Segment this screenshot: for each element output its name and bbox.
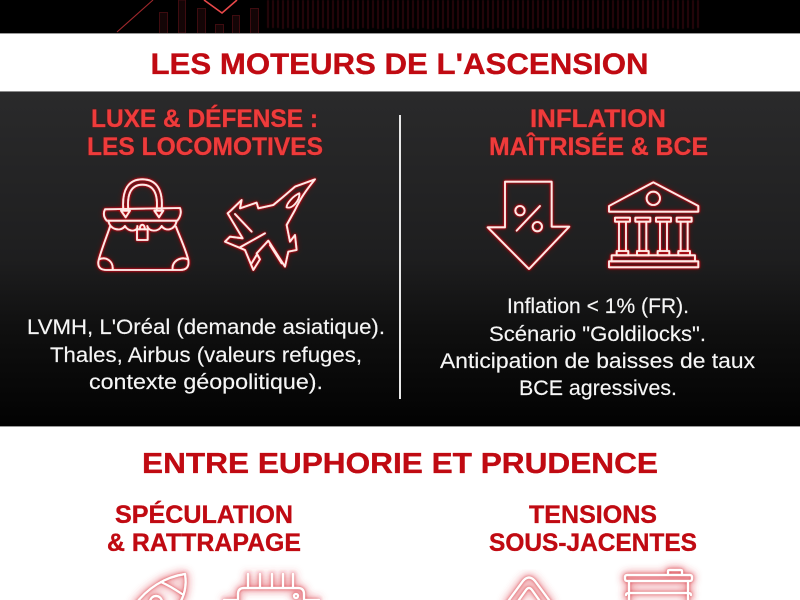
text: inflation details: BCE agressives. xyxy=(519,377,677,400)
column heading: tensions xyxy=(489,501,697,557)
text: inflation details xyxy=(440,295,756,400)
section band: les moteurs heading: LES MOTEURS DE L'ASCENSION xyxy=(150,48,648,81)
top banner: chart graphic xyxy=(0,0,800,34)
column heading: tensions: TENSIONS xyxy=(529,501,657,529)
icon: fighter jet xyxy=(225,179,315,270)
icon: warning triangle xyxy=(506,578,552,600)
column heading: inflation xyxy=(489,105,708,161)
icon: central bank xyxy=(609,182,698,267)
column heading: inflation: INFLATION xyxy=(530,105,666,133)
text: inflation details: Inflation < 1% (FR). xyxy=(507,295,689,318)
icon: percent down arrow xyxy=(488,182,569,269)
panel: entre euphorie et prudence xyxy=(0,426,800,600)
section band: les moteurs heading xyxy=(0,33,800,91)
text: luxe et defense details xyxy=(27,316,385,394)
column heading: speculation: SPÉCULATION xyxy=(115,500,293,529)
heading: entre euphorie et prudence: ENTRE EUPHORIE ET PRUDENCE xyxy=(142,448,658,480)
column heading: speculation xyxy=(107,500,301,557)
text: luxe et defense details: LVMH, L'Oréal (demande asiatique). xyxy=(27,316,385,339)
icon: microchip xyxy=(224,574,319,600)
text: luxe et defense details: Thales, Airbus (valeurs refuges, xyxy=(50,344,362,367)
text: luxe et defense details: contexte géopolitique). xyxy=(89,371,323,394)
panel: les moteurs xyxy=(0,91,800,426)
text: inflation details: Scénario "Goldilocks". xyxy=(489,323,706,346)
column heading: luxe et defense xyxy=(87,104,323,161)
text: inflation details: Anticipation de baisses de taux xyxy=(440,350,756,373)
column heading: inflation: MAÎTRISÉE & BCE xyxy=(489,131,708,161)
column heading: luxe et defense: LUXE & DÉFENSE : xyxy=(91,104,318,133)
column heading: luxe et defense: LES LOCOMOTIVES xyxy=(87,133,323,161)
column heading: speculation: & RATTRAPAGE xyxy=(107,529,301,557)
icon: oil barrel xyxy=(625,570,692,600)
icon: handbag xyxy=(98,179,189,270)
icon: rocket xyxy=(134,574,186,600)
column heading: tensions: SOUS-JACENTES xyxy=(489,529,697,557)
